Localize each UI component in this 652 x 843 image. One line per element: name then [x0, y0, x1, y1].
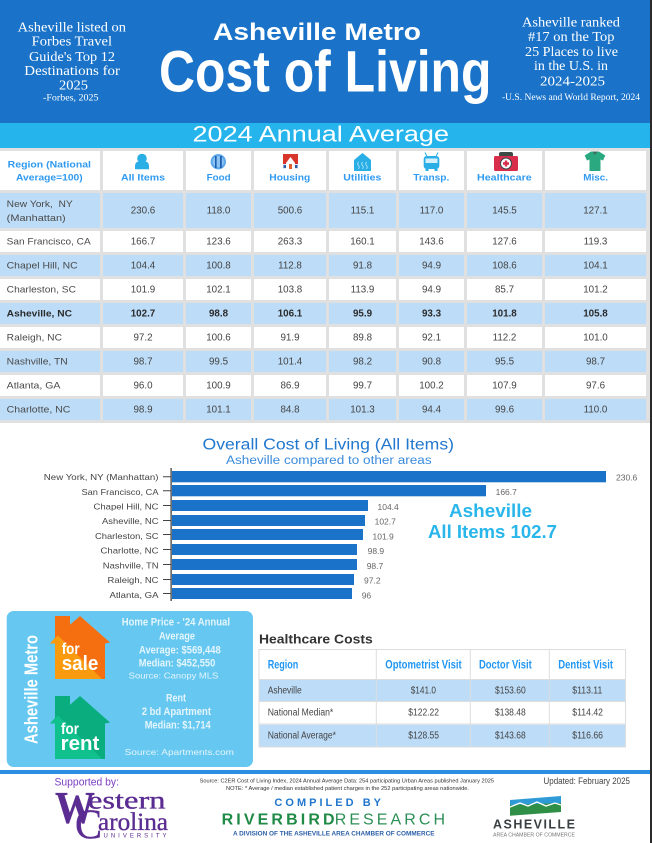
- table rows: 113.9: [351, 284, 374, 296]
- home price text: Source: Canopy MLS: [129, 670, 219, 680]
- icon: shirt: [585, 152, 605, 171]
- table rows: 95.5: [495, 356, 515, 368]
- table rows: Raleigh, NC: [7, 332, 62, 344]
- table rows: 100.9: [206, 380, 231, 392]
- table rows: 94.9: [422, 260, 441, 272]
- title: Asheville Metro: [213, 19, 421, 46]
- callout: US News ranking: [502, 16, 641, 102]
- table rows: Charleston, SC: [7, 284, 76, 296]
- callout: Forbes listing: Asheville listed on: [18, 21, 126, 36]
- source note: Source: C2ER Cost of Living Index, 2024 Annual Average Data: 254 participating Urban Areas published January 2025: [200, 779, 494, 785]
- home price text: Average: [159, 631, 195, 643]
- table rows: Nashville, TN: [7, 356, 68, 368]
- table rows: 101.3: [350, 404, 375, 416]
- table rows: 90.8: [422, 356, 442, 368]
- table rows: 93.3: [422, 308, 442, 320]
- table: healthcare costs: National Median*: [268, 708, 333, 719]
- bar chart: [44, 468, 638, 601]
- bar chart: Atlanta, GA: [110, 590, 159, 600]
- table rows: 107.9: [492, 380, 517, 392]
- home price text: Home Price - '24 Annual: [122, 617, 230, 629]
- bar chart: San Francisco, CA: [82, 487, 159, 497]
- callout: Asheville all items: All Items 102.7: [428, 522, 557, 542]
- table rows: 103.8: [278, 284, 303, 296]
- table header row: Misc.: [583, 173, 608, 184]
- logo: Riverbird Research: A DIVISION OF THE ASHEVILLE AREA CHAMBER OF COMMERCE: [233, 831, 435, 838]
- table rows: 119.3: [584, 236, 608, 248]
- logo: Western Carolina University: estern: [88, 787, 166, 814]
- table: healthcare costs: $113.11: [572, 685, 603, 696]
- table rows: Asheville, NC: [7, 308, 72, 320]
- chart heading: Overall Cost of Living (All Items): [202, 436, 454, 453]
- table: healthcare costs: $143.68: [495, 730, 526, 741]
- table rows: 85.7: [495, 284, 514, 296]
- table rows: 108.6: [492, 260, 517, 272]
- logo: Asheville Area Chamber of Commerce: AREA CHAMBER OF COMMERCE: [493, 833, 576, 839]
- logo: Western Carolina University: arolina: [98, 809, 168, 836]
- table rows: 100.2: [419, 380, 444, 392]
- logo: Western Carolina University: W: [55, 782, 95, 833]
- logo: Western Carolina University: UNIVERSITY: [104, 833, 166, 839]
- home price text: [122, 617, 230, 680]
- icon: for rent house: [50, 696, 110, 759]
- title: [159, 19, 492, 105]
- table rows: New York, NY: [7, 199, 73, 210]
- table rows: 89.8: [353, 332, 373, 344]
- table rows: 104.4: [131, 260, 156, 272]
- table header row: Housing: [269, 173, 311, 184]
- icon: house: [283, 154, 298, 169]
- table rows: 97.6: [586, 380, 606, 392]
- bar chart: 104.4: [378, 502, 399, 512]
- bar chart: Charlotte, NC: [100, 546, 158, 556]
- logo: Asheville Area Chamber of Commerce: ASHEVILLE: [493, 817, 575, 831]
- table header row: All Items: [121, 173, 165, 184]
- logo: Western Carolina University: Supported by:: [54, 777, 119, 789]
- updated date: Updated: February 2025: [544, 776, 630, 786]
- table: healthcare costs: Asheville: [268, 685, 302, 696]
- table rows: 94.9: [422, 284, 441, 296]
- logo: Riverbird Research: RIVERBIRD: [222, 811, 335, 828]
- callout: US News ranking: in the U.S. in: [534, 59, 608, 74]
- rent text: Source: Apartments.com: [125, 747, 234, 757]
- table rows: 263.3: [278, 236, 303, 248]
- bar chart: Asheville, NC: [102, 516, 158, 526]
- panel: housing costs: [7, 611, 253, 767]
- rent text: [125, 693, 234, 757]
- table header row: Healthcare: [477, 173, 532, 184]
- bar chart: 96: [362, 590, 371, 600]
- table rows: 101.8: [492, 308, 517, 320]
- table: healthcare costs: $122.22: [408, 708, 439, 719]
- bar chart: 97.2: [364, 576, 381, 586]
- bar chart: 102.7: [375, 516, 396, 526]
- table rows: 98.7: [133, 356, 153, 368]
- table header row: Food: [207, 173, 231, 184]
- table rows: 102.1: [206, 284, 231, 296]
- table header row: Transp.: [413, 173, 449, 184]
- icon: medical kit: [494, 152, 518, 171]
- table rows: 101.2: [583, 284, 608, 296]
- table header row: Average=100): [16, 173, 83, 184]
- table: healthcare costs: Doctor Visit: [479, 657, 532, 671]
- rent text: Rent: [166, 693, 186, 705]
- table rows: 104.1: [583, 260, 608, 272]
- callout: Asheville all items: [428, 501, 557, 542]
- panel: cost of living table: [0, 148, 650, 423]
- source note: NOTE: * Average / median established patient charges in the 252 participating areas nationwide.: [226, 786, 469, 792]
- table: healthcare costs: $128.55: [408, 730, 439, 741]
- table rows: 117.0: [420, 206, 444, 216]
- bar chart: New York, NY (Manhattan): [44, 472, 159, 482]
- table: healthcare costs: [259, 650, 626, 747]
- callout: Forbes listing: 2025: [59, 78, 88, 93]
- table rows: 112.8: [278, 260, 302, 272]
- table rows: 123.6: [206, 236, 231, 248]
- callout: US News ranking: 2024-2025: [540, 75, 605, 90]
- table rows: 95.9: [353, 308, 373, 320]
- icon: for rent house: rent: [61, 733, 100, 755]
- chart heading: Asheville compared to other areas: [226, 455, 432, 467]
- title: Cost of Living: [159, 40, 492, 105]
- table rows: 166.7: [131, 236, 155, 248]
- table rows: 160.1: [350, 236, 375, 248]
- table: healthcare costs: $116.66: [572, 730, 603, 741]
- table rows: 115.1: [351, 206, 374, 216]
- table rows: 96.0: [133, 380, 153, 392]
- table: healthcare costs: Optometrist Visit: [385, 657, 462, 671]
- callout: Forbes listing: Destinations for: [24, 64, 120, 79]
- table rows: 97.2: [133, 332, 153, 344]
- icon: fork and knife: [211, 154, 226, 169]
- table rows: 98.2: [353, 356, 372, 368]
- table rows: 145.5: [492, 206, 517, 216]
- table rows: 92.1: [422, 332, 441, 344]
- table: healthcare costs: $138.48: [495, 708, 526, 719]
- icon: for sale house: for: [62, 641, 80, 658]
- table rows: 101.0: [583, 332, 608, 344]
- bar chart: 230.6: [616, 472, 638, 482]
- table: healthcare costs: Dentist Visit: [558, 657, 613, 671]
- table rows: [0, 193, 646, 420]
- home price text: Median: $452,550: [139, 658, 215, 670]
- callout: US News ranking: #17 on the Top: [528, 30, 614, 45]
- table header row: Utilities: [343, 173, 381, 184]
- header banner: [0, 0, 650, 123]
- table: healthcare costs: National Average*: [268, 730, 336, 741]
- table rows: 84.8: [280, 404, 300, 416]
- table rows: 94.4: [422, 404, 442, 416]
- rotated label: Asheville Metro: [22, 635, 42, 744]
- table rows: 100.8: [206, 260, 231, 272]
- table rows: 127.6: [492, 236, 517, 248]
- home price text: Average: $569,448: [139, 645, 221, 657]
- table: healthcare costs: $141.0: [411, 685, 436, 696]
- bar chart: Charleston, SC: [95, 531, 158, 541]
- rent text: Median: $1,714: [145, 720, 211, 732]
- icon: utilities building: [354, 153, 371, 171]
- callout: Forbes listing: -Forbes, 2025: [43, 93, 99, 103]
- callout: Asheville all items: Asheville: [449, 501, 532, 521]
- table rows: 500.6: [278, 206, 303, 216]
- table rows: 112.2: [493, 332, 516, 344]
- table rows: 101.1: [206, 404, 231, 416]
- logo: Riverbird Research: RESEARCH: [335, 811, 445, 828]
- source note: [200, 779, 494, 792]
- subtitle band: 2024 Annual Average: [192, 121, 449, 146]
- table: healthcare costs: $114.42: [572, 708, 603, 719]
- logo: Riverbird Research: [222, 797, 445, 838]
- table rows: 101.4: [278, 356, 303, 368]
- table rows: 102.7: [131, 308, 156, 320]
- icon: trolley bus: [424, 152, 439, 171]
- table rows: 110.0: [584, 404, 608, 416]
- table rows: 91.9: [280, 332, 300, 344]
- logo: Western Carolina University: [54, 777, 168, 843]
- rent text: 2 bd Apartment: [142, 706, 211, 718]
- table rows: 91.8: [353, 260, 373, 272]
- bar chart: Chapel Hill, NC: [94, 502, 158, 512]
- icon: for sale house: sale: [62, 653, 98, 675]
- chart heading: [202, 436, 454, 467]
- table rows: 98.8: [209, 308, 229, 320]
- bar chart: 166.7: [496, 487, 517, 497]
- table rows: 86.9: [280, 380, 300, 392]
- bar chart: 101.9: [372, 532, 394, 542]
- table rows: San Francisco, CA: [7, 236, 91, 248]
- logo: Riverbird Research: COMPILED BY: [274, 797, 382, 809]
- table rows: 106.1: [278, 308, 303, 320]
- table rows: Atlanta, GA: [7, 380, 61, 392]
- table rows: 127.1: [583, 206, 608, 216]
- callout: Forbes listing: Forbes Travel: [32, 35, 112, 50]
- callout: US News ranking: Asheville ranked: [522, 16, 620, 31]
- table rows: (Manhattan): [7, 213, 66, 224]
- table header row: [0, 151, 646, 190]
- heading: healthcare costs: Healthcare Costs: [259, 631, 373, 646]
- bar chart: 98.9: [368, 546, 384, 556]
- table rows: 99.5: [209, 356, 229, 368]
- table rows: Charlotte, NC: [7, 404, 71, 416]
- table: healthcare costs: $153.60: [495, 685, 526, 696]
- bar chart: Nashville, TN: [103, 560, 158, 570]
- table rows: 99.7: [353, 380, 372, 392]
- callout: US News ranking: 25 Places to live: [525, 45, 618, 60]
- callout: Forbes listing: [18, 21, 126, 103]
- bar chart: Raleigh, NC: [108, 575, 158, 585]
- table rows: 118.0: [207, 206, 231, 216]
- table rows: 99.6: [495, 404, 515, 416]
- icon: person: [135, 154, 149, 169]
- table rows: 98.9: [133, 404, 153, 416]
- table: healthcare costs: Region: [268, 657, 298, 671]
- table rows: 101.9: [131, 284, 155, 296]
- table rows: 100.6: [206, 332, 231, 344]
- table rows: 98.7: [586, 356, 605, 368]
- table rows: Chapel Hill, NC: [7, 260, 78, 272]
- bar chart: 98.7: [367, 561, 384, 571]
- table rows: 105.8: [583, 308, 608, 320]
- table rows: 143.6: [419, 236, 444, 248]
- callout: US News ranking: -U.S. News and World Report, 2024: [502, 92, 641, 102]
- callout: Forbes listing: Guide's Top 12: [29, 50, 115, 65]
- table rows: 230.6: [131, 206, 156, 216]
- subtitle band: [0, 121, 650, 148]
- logo: Asheville Area Chamber of Commerce: [493, 796, 576, 839]
- icon: for sale house: [50, 616, 110, 679]
- table header row: Region (National: [8, 159, 91, 170]
- icon: for rent house: for: [61, 721, 79, 738]
